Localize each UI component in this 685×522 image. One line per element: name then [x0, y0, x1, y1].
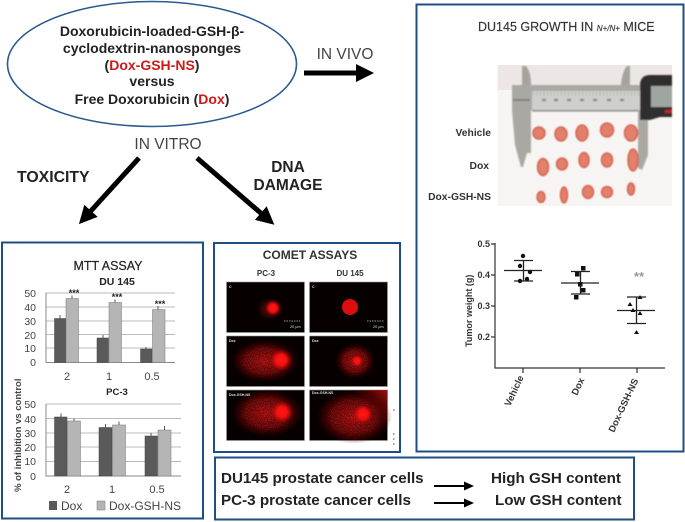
- text: high GSH: High GSH content: [491, 470, 621, 487]
- chart: tumor weight: [464, 239, 665, 434]
- chart: DU 145: 30: [24, 316, 36, 328]
- label: DNA damage: DNA: [271, 159, 305, 176]
- chart: PC-3: 1: [109, 484, 115, 496]
- legend: Dox-GSH-NS: [109, 499, 181, 513]
- photo labels: Vehicle: [456, 128, 491, 139]
- ellipse: compared formulations: cyclodextrin-nanosponges: [63, 40, 241, 56]
- chart: DU 145: DU 145: [99, 276, 135, 288]
- chart: DU 145: ***: [69, 288, 80, 298]
- chart: tumor weight: Dox: [570, 376, 588, 397]
- label: toxicity: TOXICITY: [17, 169, 90, 186]
- arrow: in vivo: [304, 70, 359, 76]
- image grid: comet micrographs: 20 µm: [290, 325, 301, 329]
- chart: DU 145: 40: [24, 302, 36, 314]
- panel: comet assays: [214, 243, 400, 452]
- arrow: DNA damage: [197, 158, 263, 215]
- chart: DU 145: 10: [24, 343, 36, 355]
- chart: DU 145: 0.5: [144, 371, 160, 383]
- ellipse: compared formulations: Free Doxorubicin (Dox): [75, 91, 229, 107]
- image grid: comet micrographs: Dox-GSH-NS: [229, 393, 251, 397]
- ellipse: compared formulations: [8, 2, 296, 126]
- image grid: comet micrographs: Dox-GSH-NS: [312, 391, 334, 395]
- chart: DU 145: 2: [64, 371, 70, 383]
- chart: tumor weight: **: [634, 269, 645, 284]
- chart: DU 145: 1: [106, 371, 112, 383]
- chart: PC-3: 0: [30, 471, 36, 483]
- panel: GSH content summary: [215, 458, 634, 520]
- arrow: toxicity: [89, 158, 139, 213]
- chart: PC-3: 0.5: [149, 484, 165, 496]
- chart: PC-3: 2: [64, 484, 70, 496]
- chart: tumor weight: Dox-GSH-NS: [607, 377, 641, 434]
- chart: PC-3: 30: [24, 428, 36, 440]
- heading: DU145 growth: DU145 GROWTH IN N+/N+ MICE: [478, 20, 655, 34]
- text: DU145 row: DU145 prostate cancer cells: [221, 470, 424, 487]
- stray specks: [393, 410, 394, 444]
- chart: PC-3: [24, 387, 181, 496]
- chart: DU 145: ***: [155, 299, 166, 309]
- ellipse: compared formulations: Doxorubicin-loaded-GSH-β-: [60, 23, 244, 39]
- chart: tumor weight: 0.5: [477, 239, 490, 249]
- legend: [49, 499, 181, 513]
- chart: DU 145: [24, 276, 175, 383]
- chart: tumor weight: 0.2: [477, 332, 490, 342]
- label: in vitro: IN VITRO: [134, 136, 202, 153]
- chart: tumor weight: Tumor weight (g): [464, 275, 474, 347]
- chart: tumor weight: 0.3: [477, 301, 490, 311]
- photo labels: Dox-GSH-NS: [428, 192, 491, 203]
- chart: DU 145: 50: [24, 288, 36, 300]
- chart: DU 145: 0: [30, 357, 36, 369]
- image grid: comet micrographs: 20 µm: [373, 325, 384, 329]
- image grid: comet micrographs: C: [312, 285, 315, 289]
- image grid: comet micrographs: [226, 282, 392, 444]
- photo labels: [428, 128, 491, 203]
- chart: tumor weight: Vehicle: [503, 374, 527, 408]
- column label: DU 145: DU 145: [336, 269, 364, 278]
- chart: PC-3: 50: [24, 399, 36, 411]
- legend: Dox: [61, 499, 82, 513]
- text: PC-3 row: PC-3 prostate cancer cells: [221, 492, 411, 509]
- arrow: DU145: [434, 485, 466, 487]
- heading: comet assays: COMET ASSAYS: [263, 248, 357, 262]
- photo: caliper and tumors: [498, 65, 672, 206]
- image grid: comet micrographs: Dox: [312, 339, 319, 343]
- chart: DU 145: 20: [24, 330, 36, 342]
- label: DNA damage: DAMAGE: [254, 177, 322, 194]
- panel: MTT assay: [2, 242, 203, 518]
- arrow: PC-3: [434, 502, 466, 504]
- column label: PC-3: PC-3: [257, 269, 276, 278]
- chart: PC-3: 40: [24, 414, 36, 426]
- chart: PC-3: 10: [24, 456, 36, 468]
- panel: in vivo growth: [416, 4, 684, 452]
- label: in vivo: IN VIVO: [317, 46, 373, 63]
- ellipse: compared formulations: (Dox-GSH-NS): [105, 57, 199, 73]
- y-axis label: % of inhibition vs control: [13, 379, 24, 492]
- heading: MTT assay: MTT ASSAY: [73, 259, 143, 273]
- chart: tumor weight: 0.4: [477, 270, 490, 280]
- chart: PC-3: 20: [24, 442, 36, 454]
- chart: DU 145: ***: [112, 292, 123, 302]
- photo labels: Dox: [470, 161, 489, 172]
- ellipse: compared formulations: versus: [129, 73, 175, 89]
- image grid: comet micrographs: C: [229, 285, 232, 289]
- chart: PC-3: PC-3: [106, 387, 128, 398]
- image grid: comet micrographs: Dox: [229, 339, 236, 343]
- text: low GSH: Low GSH content: [495, 492, 622, 509]
